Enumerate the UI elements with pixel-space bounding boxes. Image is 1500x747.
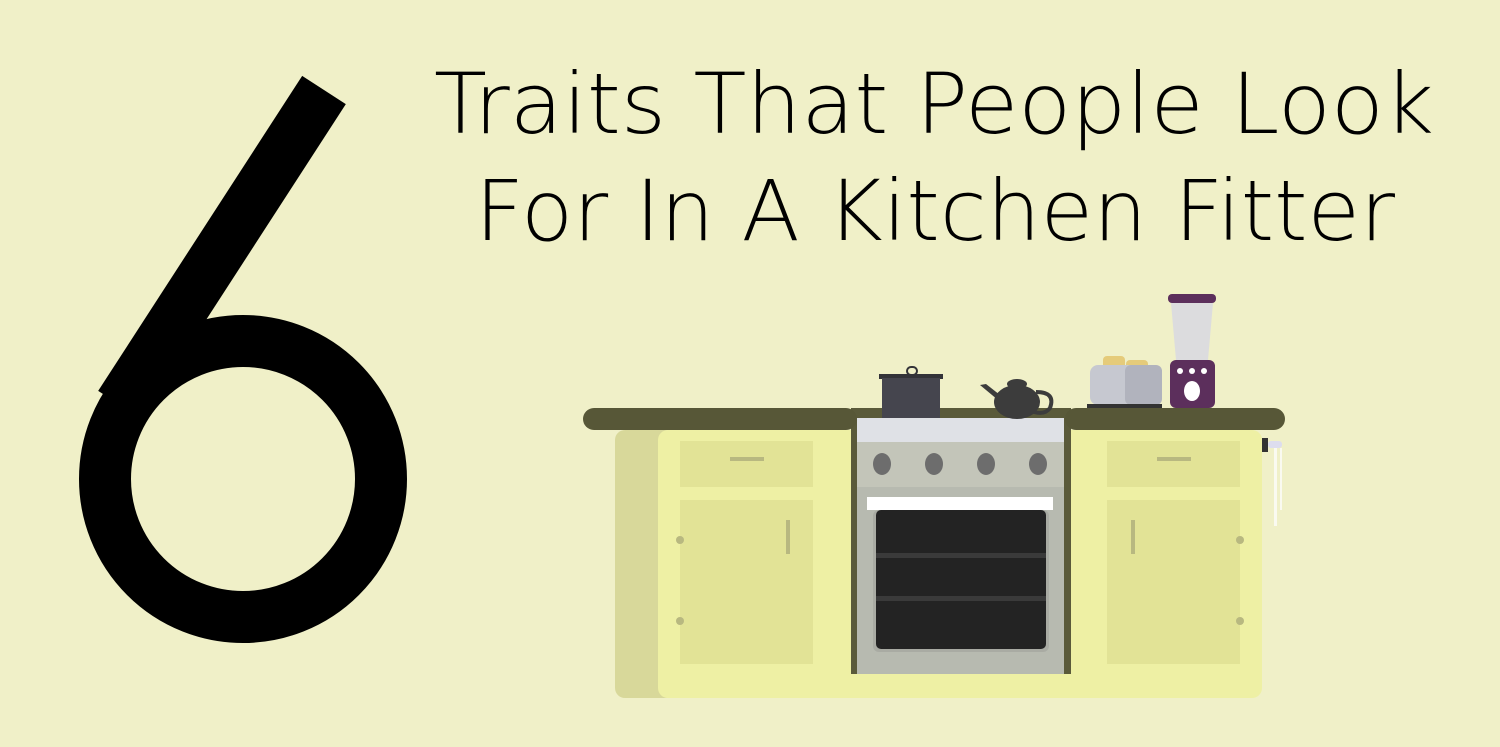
kitchen illustration	[583, 294, 1285, 698]
kettle	[980, 379, 1051, 419]
cabinets	[615, 430, 1262, 698]
big number six	[105, 90, 381, 617]
title: Traits That People Look	[434, 55, 1434, 153]
pot	[879, 367, 943, 418]
blender	[1168, 294, 1216, 408]
title: For In A Kitchen Fitter	[475, 162, 1395, 260]
toaster	[1087, 356, 1162, 408]
countertop	[583, 408, 1285, 430]
towel hook	[1262, 438, 1282, 526]
oven	[851, 408, 1071, 674]
title	[434, 55, 1434, 260]
